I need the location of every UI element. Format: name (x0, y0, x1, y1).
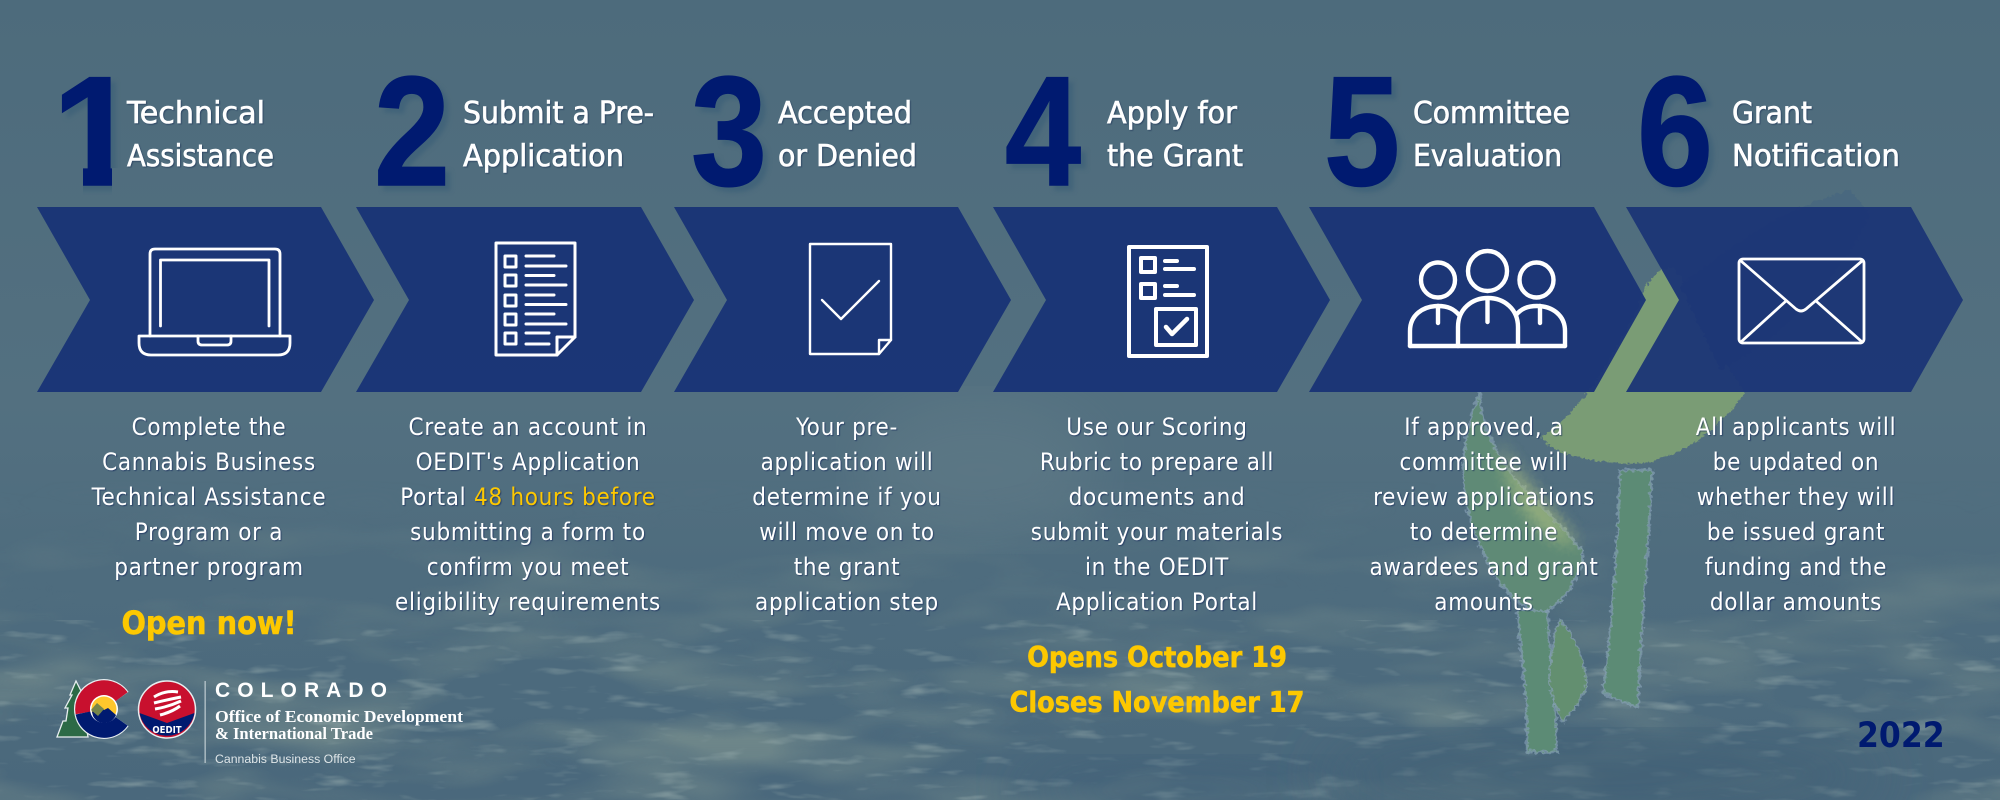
chevron 1 (37, 207, 374, 392)
heading 1: Technical (126, 96, 265, 131)
logo text: & International Trade (215, 724, 373, 743)
logo text: Office of Economic Development (215, 707, 463, 726)
icon: OEDIT seal: OEDIT (152, 725, 182, 736)
text: step 4 description: Application Portal (1056, 588, 1258, 616)
text: step 2 description: confirm you meet (427, 553, 629, 581)
heading 2: Application (463, 139, 624, 174)
icon: document with check mark (810, 244, 891, 354)
text: step 6 description: funding and the (1705, 553, 1887, 581)
year: 2022 (1857, 716, 1945, 756)
text: step 3 description: application step (755, 588, 939, 616)
chevron 5 (1309, 207, 1646, 392)
step number 4: 4 (1005, 45, 1081, 219)
text: step 5 description: If approved, a (1404, 413, 1564, 441)
text: step 5 description: to determine (1410, 518, 1558, 546)
logo text: COLORADO (215, 679, 387, 702)
text: step 3 description: will move on to (759, 518, 935, 546)
text: step 2 description: Portal 48 hours before (400, 483, 656, 511)
step number 2: 2 (374, 45, 450, 219)
text: step 3 description: determine if you (752, 483, 942, 511)
step number 5: 5 (1324, 45, 1400, 219)
heading 6: Notification (1732, 139, 1900, 174)
heading 2: Submit a Pre- (463, 96, 654, 131)
icon: rubric form (1129, 247, 1207, 356)
chevron 3 (674, 207, 1011, 392)
text: step 1 description: Technical Assistance (91, 483, 326, 511)
text: step 5 description: review applications (1373, 483, 1595, 511)
logo divider (204, 681, 206, 763)
icon: laptop (139, 249, 290, 355)
logo: Colorado and OEDIT (57, 679, 463, 766)
text: step 4 description: Rubric to prepare all (1040, 448, 1274, 476)
text: step 3 description: the grant (794, 553, 900, 581)
text: step 5 description: amounts (1434, 588, 1534, 616)
text: step 5 description: awardees and grant (1369, 553, 1599, 581)
text: step 6 description: All applicants will (1696, 413, 1896, 441)
heading 1: Assistance (127, 139, 274, 174)
text: step 6 description: be issued grant (1707, 518, 1885, 546)
text: step 1 description: Program or a (135, 518, 283, 546)
callout: application dates: Opens October 19 (1027, 641, 1287, 674)
text: step 4 description: documents and (1069, 483, 1245, 511)
text: step 1 description: partner program (114, 553, 304, 581)
heading 5: Evaluation (1413, 139, 1562, 174)
callout: open now: Open now! (121, 604, 297, 642)
heading 5: Committee (1413, 96, 1570, 131)
text: step 5 description: committee will (1400, 448, 1568, 476)
text: step 4 description: submit your materials (1031, 518, 1283, 546)
text: step 6 description: whether they will (1697, 483, 1895, 511)
text: step 6 description: be updated on (1713, 448, 1879, 476)
heading 3: Accepted (778, 96, 912, 131)
text: step 2 description: OEDIT's Application (416, 448, 640, 476)
icon: envelope (1739, 259, 1864, 343)
step number 1: 1 (52, 45, 139, 219)
text: step 4 description: in the OEDIT (1085, 553, 1229, 581)
background: soil and seedling photo (0, 268, 2000, 800)
text: step 4 description: Use our Scoring (1066, 413, 1248, 441)
chevron 2 (356, 207, 694, 392)
icon: Colorado C with tree (57, 681, 122, 737)
icon: OEDIT seal (138, 681, 196, 738)
text: step 3 description: application will (761, 448, 933, 476)
text: step 2 description: submitting a form to (410, 518, 646, 546)
icon: checklist document (496, 243, 575, 355)
text: step 2 description: eligibility requirements (395, 588, 661, 616)
text: step 6 description: dollar amounts (1710, 588, 1882, 616)
heading 4: the Grant (1107, 139, 1243, 174)
logo text (215, 679, 463, 766)
text: step 1 description: Cannabis Business (102, 448, 316, 476)
icon: committee of three people (1410, 251, 1565, 346)
text: step 3 description: Your pre- (795, 413, 898, 441)
step number 3: 3 (691, 45, 767, 219)
logo text: Cannabis Business Office (215, 752, 356, 766)
callout: application dates: Closes November 17 (1010, 686, 1304, 719)
chevron 4 (993, 207, 1330, 392)
chevron 6 (1626, 207, 1963, 392)
heading 4: Apply for (1107, 96, 1238, 131)
seedling (1464, 190, 1870, 752)
heading 3: or Denied (778, 139, 917, 174)
text: step 1 description: Complete the (132, 413, 286, 441)
text: step 2 description: Create an account in (409, 413, 647, 441)
heading 6: Grant (1732, 96, 1812, 131)
step number 6: 6 (1637, 45, 1713, 219)
